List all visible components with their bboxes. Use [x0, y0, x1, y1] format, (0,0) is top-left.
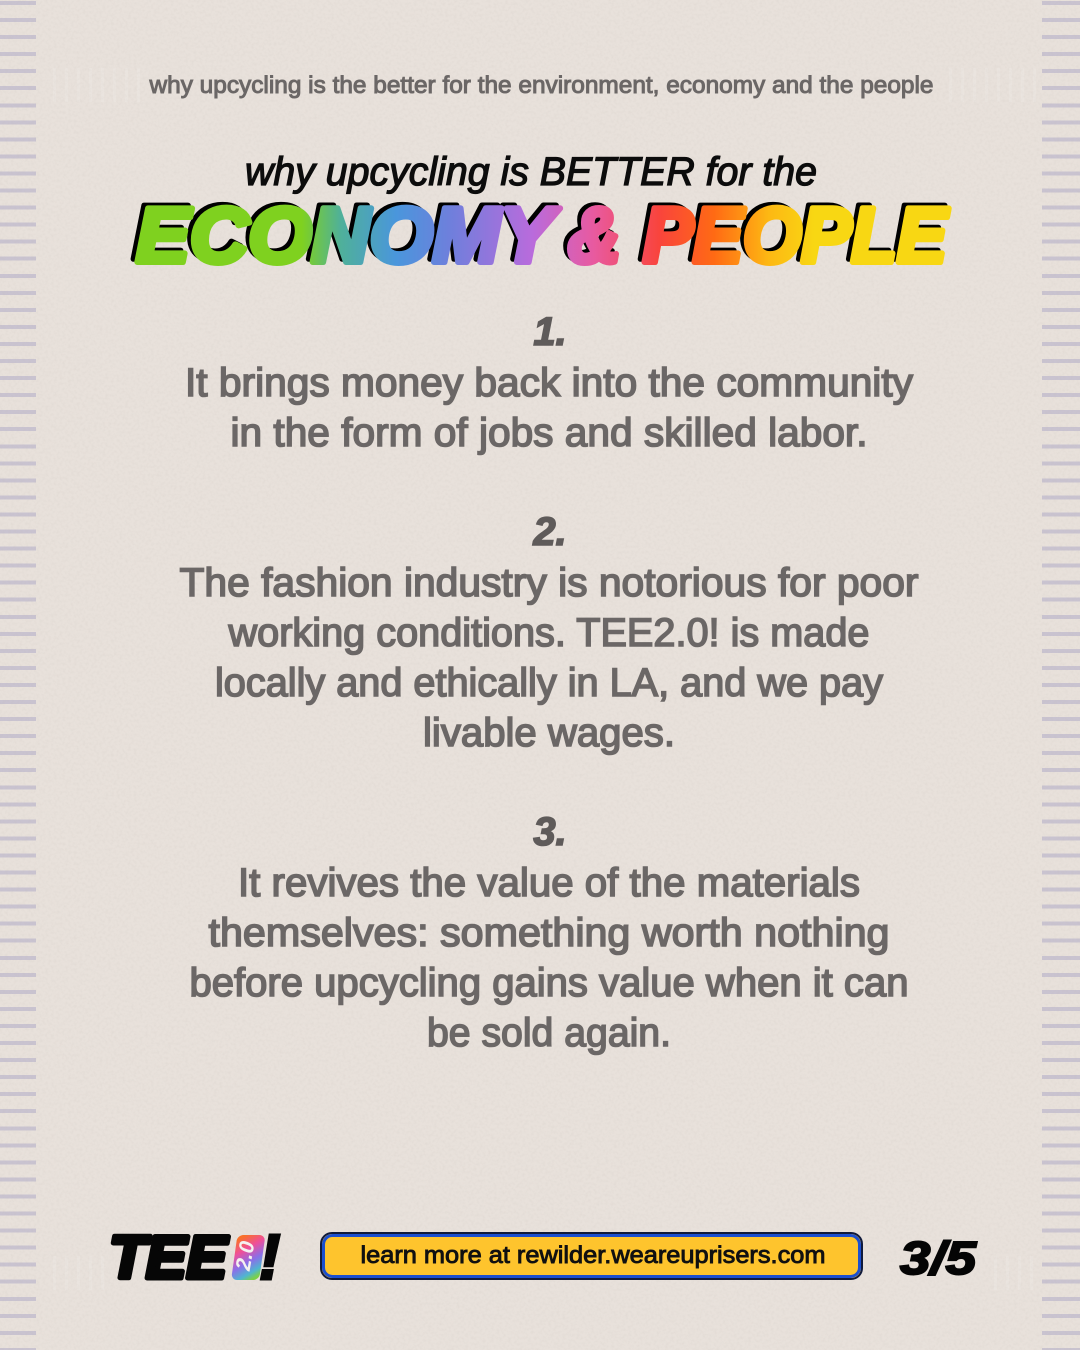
point 3: before upcycling gains value when it can	[190, 961, 908, 1005]
button: learn more: learn more at rewilder.weareuprisers.com	[360, 1242, 826, 1269]
point 3: 3.	[533, 810, 567, 854]
left stripe border	[0, 0, 36, 1350]
rainbow title: ECONOMY	[132, 188, 556, 276]
logo: TEE 2.0!	[109, 1221, 280, 1293]
top subtitle: why upcycling is the better for the environment, economy and the people	[148, 72, 933, 99]
point 3: themselves: something worth nothing	[208, 911, 890, 955]
logo: TEE 2.0!: TEE	[109, 1224, 229, 1291]
icon: rainbow 2.0 badge: 2.0	[232, 1239, 260, 1273]
rainbow title: &	[564, 188, 617, 276]
rainbow title: PEOPLE	[639, 188, 945, 276]
point 3: It revives the value of the materials	[238, 861, 860, 905]
point 1: in the form of jobs and skilled labor.	[230, 411, 868, 455]
right stripe border	[1042, 0, 1080, 1350]
point 2: The fashion industry is notorious for poor	[180, 561, 918, 605]
rainbow title	[132, 188, 949, 279]
rainbow title: ECONOMY	[136, 191, 560, 279]
point 2: livable wages.	[423, 711, 675, 755]
point 2: locally and ethically in LA, and we pay	[215, 661, 883, 705]
page number: 3/5	[900, 1232, 978, 1284]
point 3	[190, 810, 908, 1055]
rainbow title: &	[568, 191, 621, 279]
point 1: It brings money back into the community	[185, 361, 913, 405]
point 1	[185, 310, 913, 455]
logo: TEE 2.0!: !	[259, 1221, 280, 1293]
heading line: why upcycling is BETTER for the	[245, 150, 817, 194]
rainbow title: PEOPLE	[643, 191, 949, 279]
button: learn more	[321, 1233, 862, 1279]
point 1: 1.	[533, 310, 567, 354]
point 3: be sold again.	[427, 1011, 671, 1055]
icon: rainbow 2.0 badge	[231, 1235, 265, 1280]
point 2: 2.	[532, 510, 567, 554]
point 2	[180, 510, 918, 755]
point 2: working conditions. TEE2.0! is made	[228, 611, 870, 655]
